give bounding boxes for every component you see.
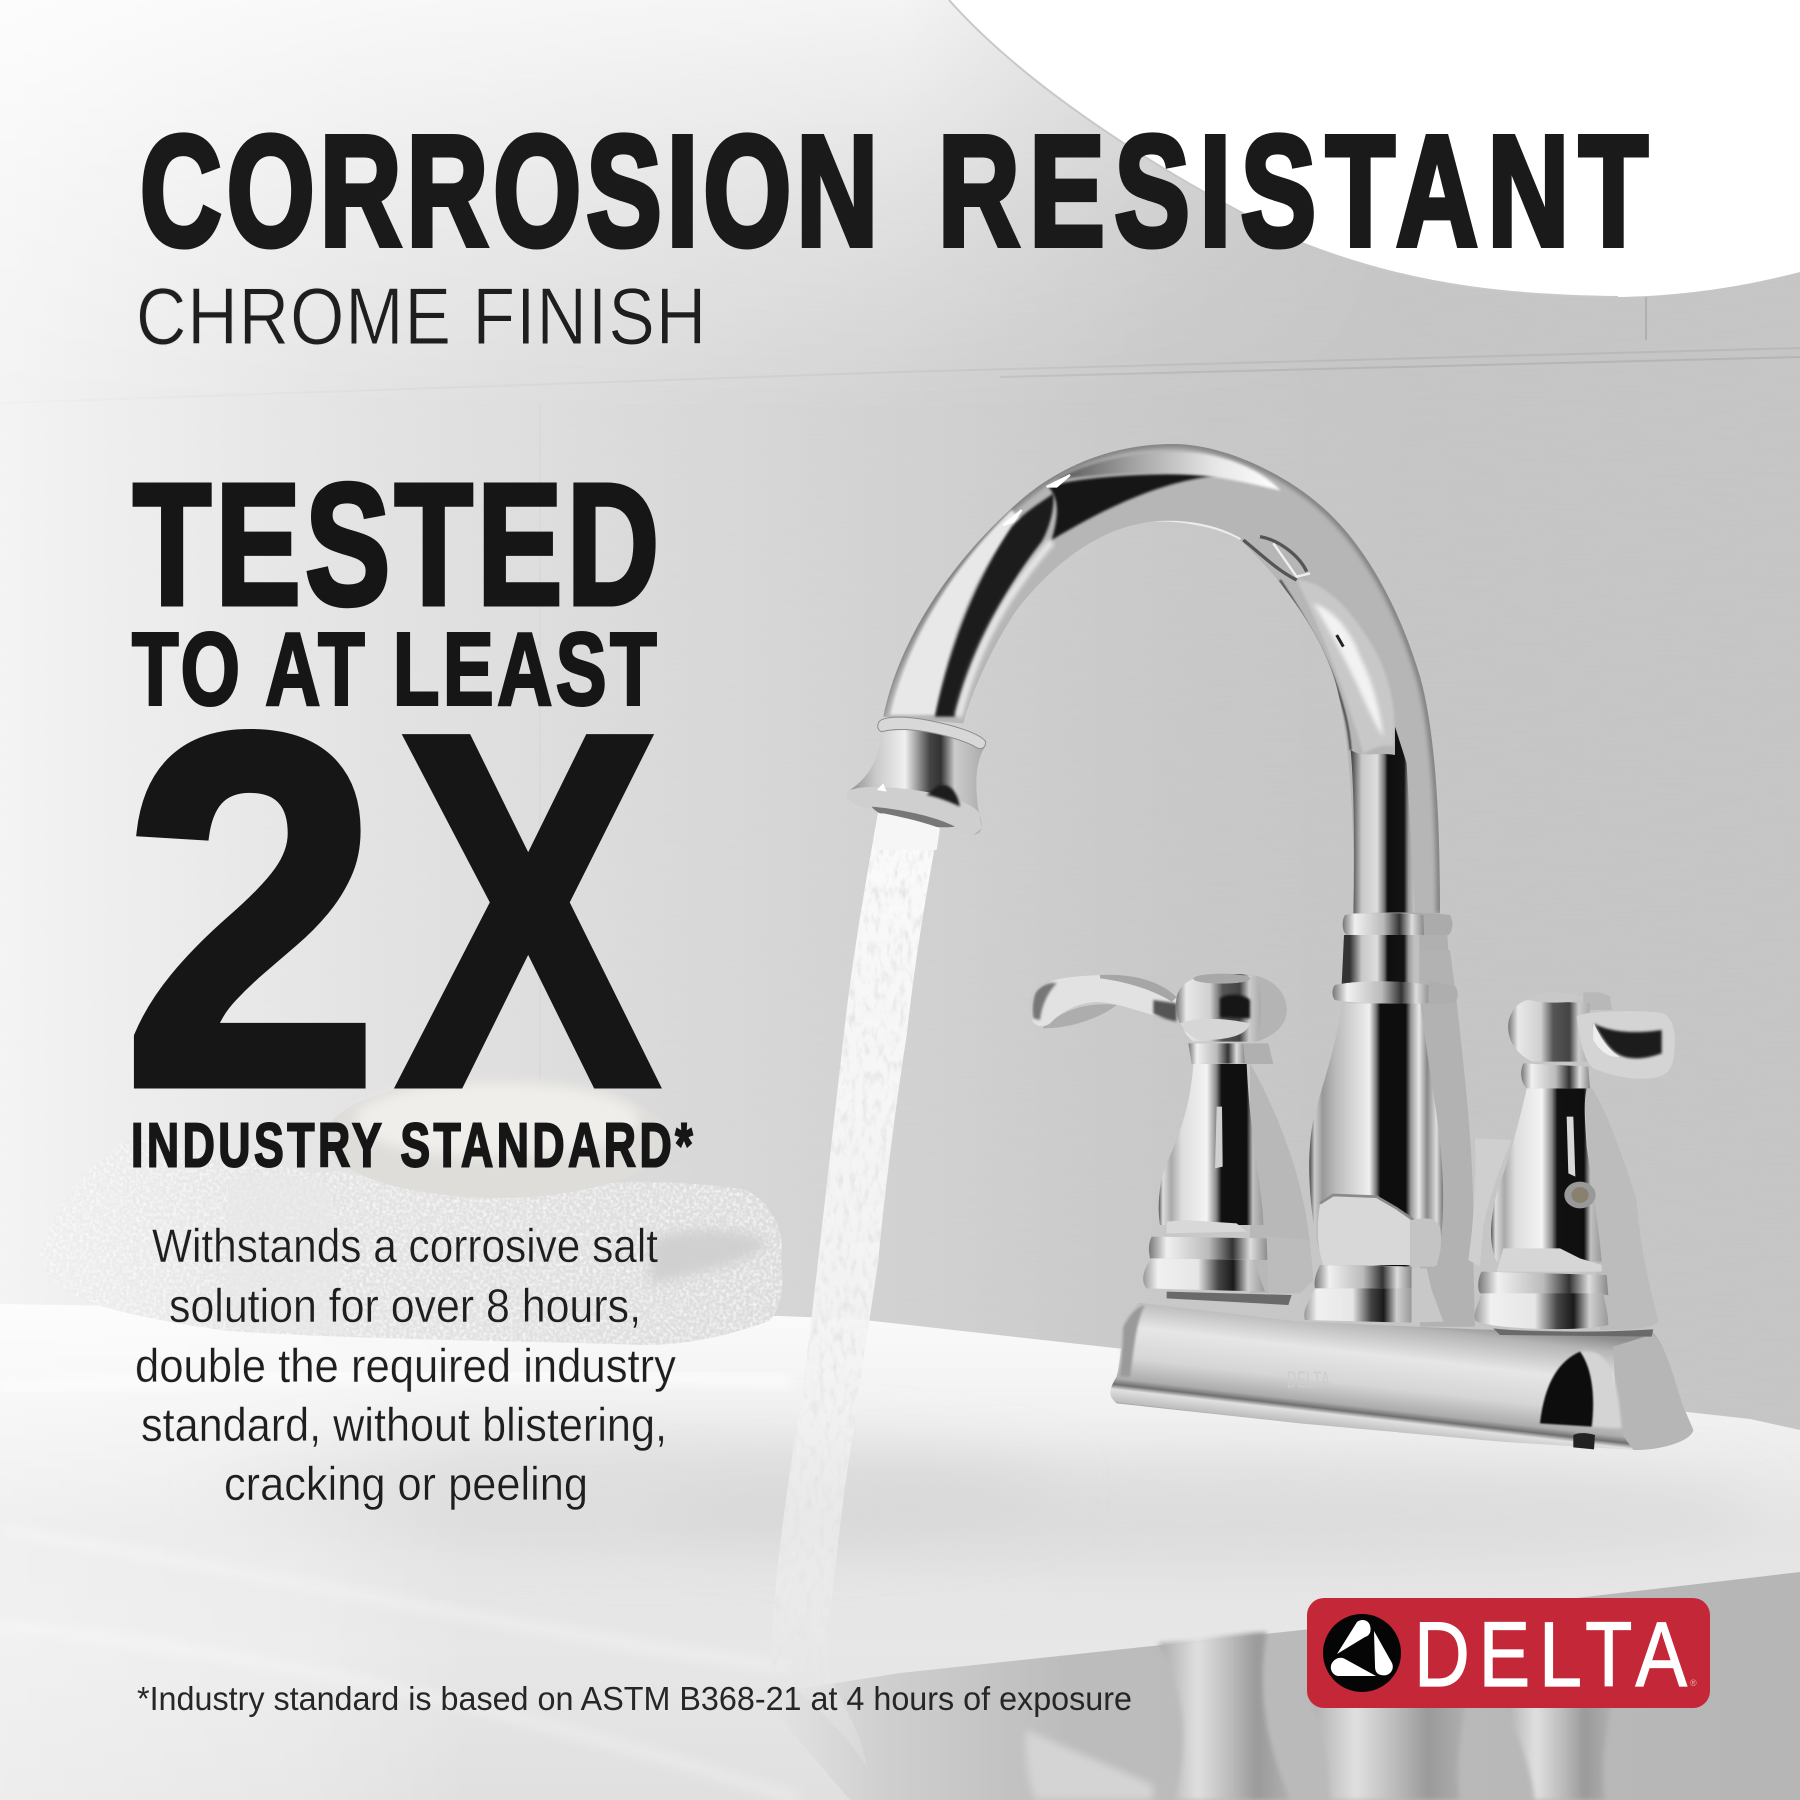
- deck plate: [1110, 1303, 1693, 1450]
- body text: cracking or peeling: [224, 1457, 588, 1510]
- registered mark: ®: [1690, 1678, 1697, 1688]
- soap bar: [325, 1078, 669, 1198]
- right knob: [1508, 1000, 1590, 1062]
- left handle matte back: [1250, 1063, 1313, 1293]
- body text: double the required industry: [135, 1339, 676, 1392]
- curved spout tube: [880, 444, 1440, 913]
- right gasket: [1493, 1328, 1653, 1337]
- left bell: [1159, 1064, 1263, 1225]
- headline: tested to at least 2X: [122, 448, 693, 1191]
- title: CORROSION: [140, 103, 878, 278]
- background: tiled wall: [0, 0, 1800, 1430]
- title: [140, 103, 1648, 278]
- 2X: [122, 631, 661, 1191]
- footnote: *Industry standard is based on ASTM B368-21 at 4 hours of exposure: [137, 1680, 1132, 1717]
- left knob: [1257, 976, 1287, 1042]
- body text: [135, 1219, 676, 1510]
- Delta logo: [1307, 1598, 1710, 1708]
- right lower rings: [1497, 1248, 1602, 1272]
- right handle set screw: [1564, 1182, 1596, 1208]
- body text: standard, without blistering,: [141, 1398, 667, 1451]
- left lever: [1031, 975, 1177, 1026]
- centre column rear shank: [1420, 950, 1475, 1327]
- white curved mirror: [949, 0, 1800, 297]
- body text: Withstands a corrosive salt: [152, 1219, 658, 1272]
- faucet body group: [1031, 950, 1693, 1450]
- icon: Delta triangle mark: [1323, 1614, 1401, 1692]
- towel: [40, 1137, 782, 1345]
- to at least: TO AT LEAST: [132, 612, 657, 727]
- rear valve stem: [1468, 1138, 1512, 1267]
- spout end bell: [847, 729, 985, 850]
- industry standard: INDUSTRY STANDARD*: [131, 1111, 693, 1180]
- 2X: 2: [122, 631, 380, 1191]
- left lower rings: [1149, 1237, 1268, 1260]
- chrome faucet: [847, 444, 1693, 1450]
- falling water stream: [771, 813, 941, 1768]
- right handle: [1475, 992, 1675, 1337]
- left lever shadow: [1043, 1004, 1117, 1028]
- spout end ring: [878, 717, 986, 749]
- tested: TESTED: [133, 448, 659, 642]
- white sink: [0, 1304, 1800, 1800]
- body text: solution for over 8 hours,: [169, 1279, 641, 1332]
- faucet spout and neck: [847, 444, 1452, 985]
- title: RESISTANT: [938, 103, 1648, 278]
- left neck rings: [1188, 1043, 1245, 1064]
- right neck rings: [1521, 1063, 1590, 1088]
- basin shadow with faucet reflection: [760, 1572, 1800, 1800]
- left handle: [1031, 974, 1313, 1305]
- neck below collar: [1342, 935, 1451, 985]
- wordmark: DELTA: [1414, 1604, 1687, 1707]
- right bell: [1491, 1088, 1602, 1262]
- left gasket: [1167, 1292, 1292, 1305]
- first collar ring: [1343, 912, 1452, 935]
- centre column bell: [1304, 981, 1458, 1323]
- 2X: X: [397, 631, 661, 1191]
- deck plate brand mark: DELTA: [1287, 1366, 1331, 1392]
- right handle matte back: [1583, 1080, 1658, 1330]
- right lever: [1577, 1011, 1675, 1079]
- subtitle: CHROME FINISH: [136, 272, 706, 362]
